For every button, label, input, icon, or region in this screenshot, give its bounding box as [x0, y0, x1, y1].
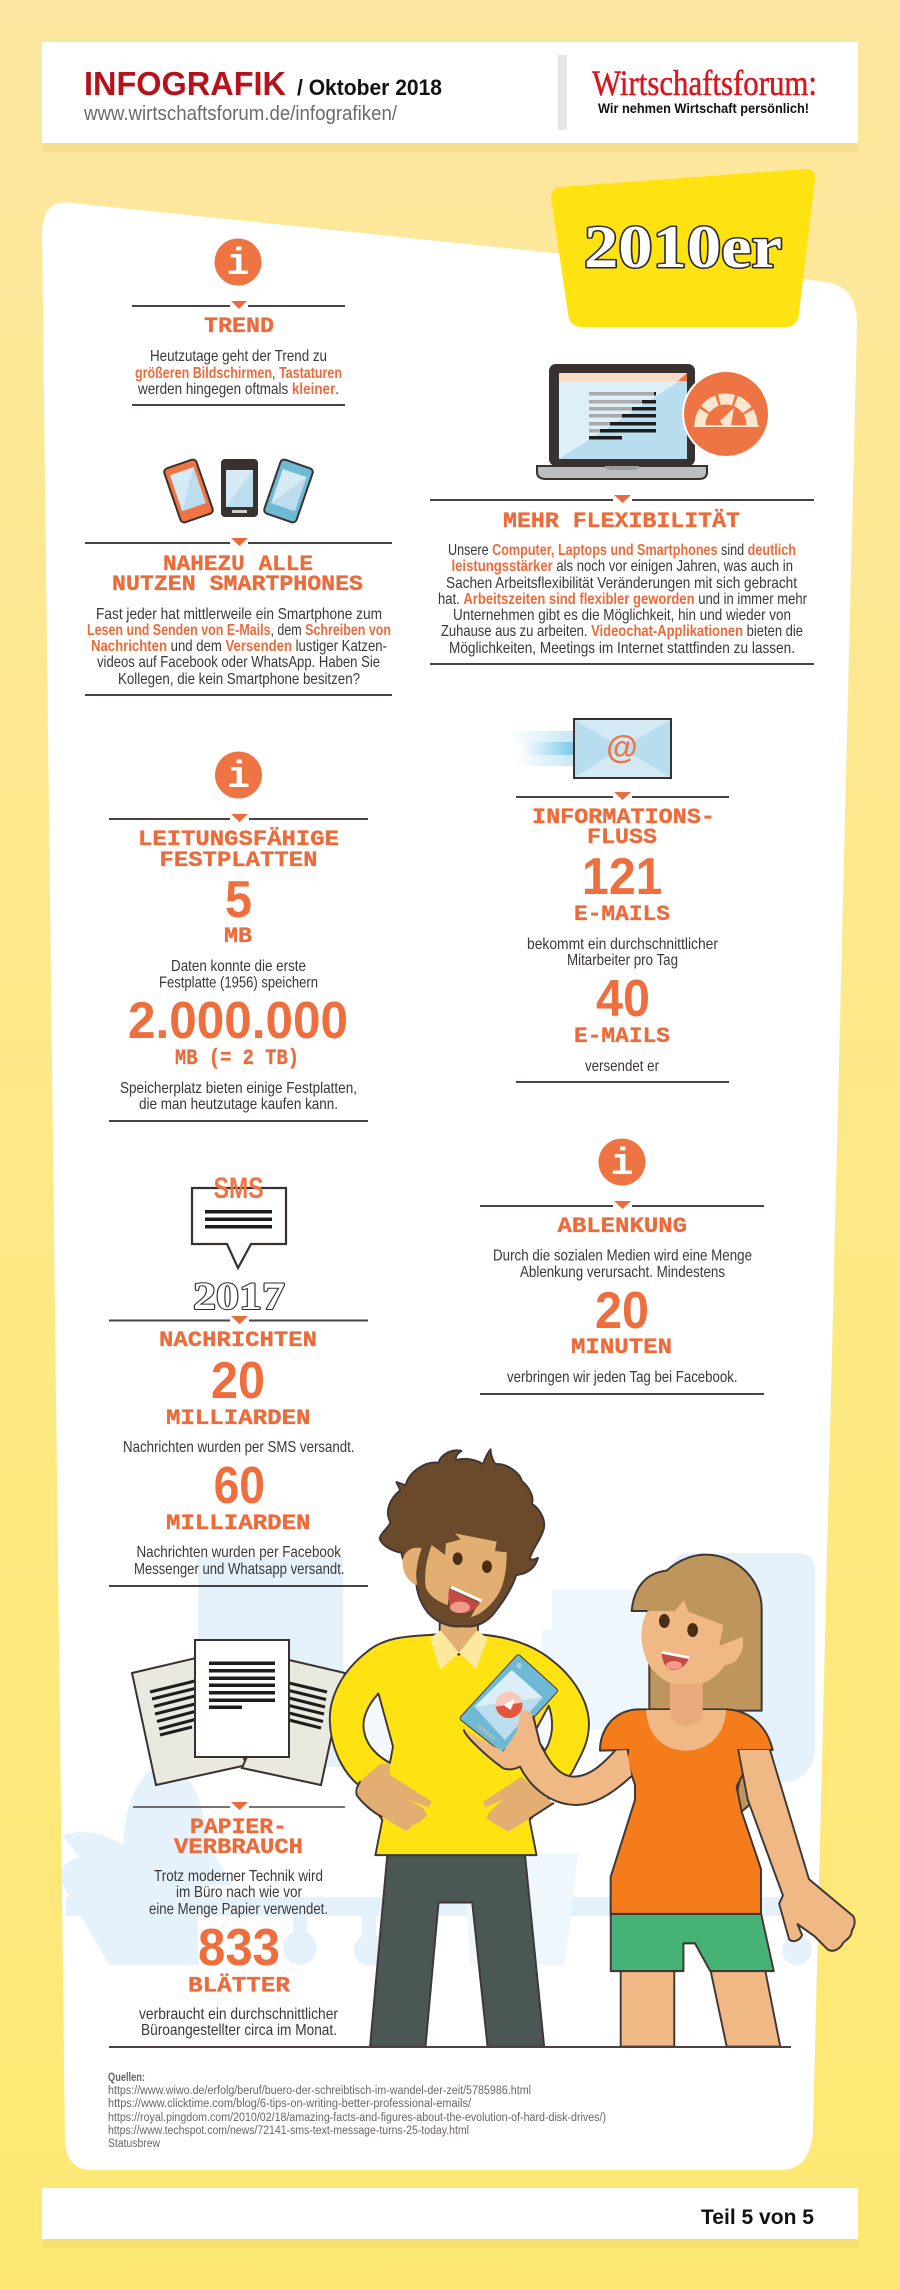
- heading: [112, 552, 363, 597]
- body text: [135, 348, 342, 398]
- number: 5: 5: [225, 871, 252, 929]
- man: hands: [356, 1763, 553, 1832]
- text: Daten konnte die erste: [171, 958, 306, 975]
- unit: BLÄTTER: [188, 1974, 291, 1998]
- body text: Fast jeder hat mittlerweile ein Smartphone zum: [96, 606, 382, 623]
- heading: TREND: [204, 314, 274, 339]
- illustration: phone: [463, 1657, 555, 1749]
- divider: [132, 301, 345, 309]
- text: im Büro nach wie vor: [176, 1884, 303, 1901]
- panel: Ablenkung: [480, 1138, 764, 1394]
- unit: MB (= 2 TB): [175, 1046, 299, 1071]
- unit: E-MAILS: [574, 1024, 670, 1049]
- divider: [109, 814, 368, 822]
- divider: [133, 1802, 345, 1810]
- body text: Nachrichten und dem Versenden lustiger Katzen-: [91, 638, 387, 655]
- panel: Leitungsfähige Festplatten: [109, 752, 368, 1121]
- woman: shirt and neck: [600, 1683, 773, 1914]
- panel: Nahezu alle nutzen Smartphones: [85, 459, 392, 695]
- text: Speicherplatz bieten einige Festplatten,: [120, 1080, 357, 1097]
- text: Messenger und Whatsapp versandt.: [134, 1561, 344, 1578]
- era label: 2010er: 2010er: [584, 214, 782, 280]
- woman: right arm and hand: [738, 1750, 855, 1951]
- illustration: woman: [600, 1555, 855, 2047]
- year: 2017: 2017: [193, 1275, 285, 1318]
- heading: VERBRAUCH: [174, 1835, 303, 1860]
- text: Festplatte (1956) speichern: [159, 974, 318, 992]
- heading: [138, 827, 339, 873]
- text: verbringen wir jeden Tag bei Facebook.: [507, 1369, 738, 1386]
- number: 40: 40: [596, 970, 650, 1028]
- icon: three phones: [163, 459, 314, 523]
- text: [120, 1080, 357, 1113]
- body text: hat. Arbeitszeiten sind flexibler geworden und in immer mehr: [438, 591, 808, 608]
- number: 60: 60: [214, 1457, 265, 1515]
- heading: [174, 1815, 303, 1860]
- heading: PAPIER-: [190, 1815, 287, 1840]
- divider: [109, 1316, 368, 1324]
- heading: ABLENKUNG: [558, 1214, 687, 1239]
- url: www.wirtschaftsforum.de/infografiken/: [83, 103, 397, 125]
- body text: Heutzutage geht der Trend zu: [150, 348, 327, 365]
- icon: flying envelope: @: [606, 729, 638, 765]
- text: versendet er: [585, 1058, 660, 1075]
- body text: Unsere Computer, Laptops und Smartphones sind deutlich: [448, 542, 796, 559]
- icon: info: i: [227, 756, 250, 799]
- background office silhouette: [61, 1553, 815, 1966]
- body text: werden hingegen oftmals kleiner.: [137, 381, 339, 398]
- panel: Nachrichten: [109, 1172, 368, 1586]
- unit: MILLIARDEN: [166, 1511, 310, 1536]
- number: 20: 20: [595, 1282, 649, 1340]
- icon: SMS bubble: SMS: [214, 1172, 264, 1205]
- text: Nachrichten wurden per Facebook: [136, 1544, 342, 1561]
- number: 833: 833: [198, 1919, 280, 1977]
- panel: Papierverbrauch: [132, 1640, 345, 2039]
- yellow era tag: [551, 169, 815, 327]
- woman: legs: [621, 1969, 780, 2047]
- heading: INFORMATIONS-: [532, 805, 715, 830]
- sources: https://royal.pingdom.com/2010/02/18/amazing-facts-and-figures-about-the-evolution-of-hard-disk-drives/): [108, 2112, 606, 2124]
- divider: [480, 1201, 764, 1209]
- heading: NACHRICHTEN: [159, 1328, 317, 1353]
- sources: https://www.wiwo.de/erfolg/beruf/buero-der-schreibtisch-im-wandel-der-zeit/5785986.html: [108, 2085, 531, 2097]
- sources: [108, 2072, 606, 2150]
- footer bar: [42, 2188, 858, 2248]
- heading: MEHR FLEXIBILITÄT: [503, 509, 740, 534]
- sources: Statusbrew: [108, 2138, 161, 2150]
- heading: [532, 805, 715, 850]
- icon: info: [214, 238, 262, 286]
- icon: laptop with gauge: [537, 364, 769, 479]
- illustration: woman's arm holding phone: [464, 1710, 632, 1805]
- sources: https://www.techspot.com/news/72141-sms-text-message-turns-25-today.html: [108, 2125, 469, 2137]
- divider: [430, 495, 814, 503]
- text: [159, 958, 318, 992]
- text: [493, 1248, 752, 1281]
- icon: paper sheets: [132, 1640, 345, 1785]
- ground line: [109, 2046, 791, 2048]
- man: body and hair: [330, 1449, 589, 2047]
- text: [527, 936, 719, 969]
- body text: Möglichkeiten, Meetings im Internet stattfinden zu lassen.: [449, 640, 795, 657]
- logo tagline: Wir nehmen Wirtschaft persönlich!: [598, 100, 809, 116]
- text: verbraucht ein durchschnittlicher: [139, 2006, 339, 2023]
- icon: info: i: [227, 243, 249, 286]
- text: Nachrichten wurden per SMS versandt.: [123, 1439, 354, 1456]
- sources: Quellen:: [108, 2072, 145, 2084]
- unit: MB: [224, 924, 252, 949]
- heading: FLUSS: [587, 825, 657, 850]
- body text: Lesen und Senden von E-Mails, dem Schreiben von: [87, 622, 391, 639]
- part label: Teil 5 von 5: [701, 2206, 814, 2229]
- icon: SMS bubble: [192, 1172, 286, 1268]
- text: [149, 1868, 328, 1918]
- icon: info: [598, 1138, 646, 1186]
- icon: info: [215, 752, 262, 799]
- text: Ablenkung verursacht. Mindestens: [520, 1264, 725, 1281]
- text: eine Menge Papier verwendet.: [149, 1901, 328, 1918]
- text: die man heutzutage kaufen kann.: [139, 1096, 338, 1113]
- panel: Mehr Flexibilität: [430, 364, 814, 664]
- icon: flying envelope: [509, 719, 671, 778]
- text: Büroangestellter circa im Monat.: [141, 2022, 337, 2039]
- heading: FESTPLATTEN: [160, 848, 318, 873]
- text: [139, 2006, 339, 2039]
- logo wordmark: Wirtschaftsforum:: [592, 63, 817, 103]
- text: Trotz moderner Technik wird: [154, 1868, 323, 1885]
- main white panel: [42, 202, 857, 2170]
- woman: shorts: [611, 1750, 855, 1971]
- unit: MILLIARDEN: [166, 1406, 310, 1431]
- header bar: [42, 42, 858, 152]
- number: 2.000.000: 2.000.000: [128, 992, 348, 1050]
- text: Durch die sozialen Medien wird eine Menge: [493, 1248, 752, 1264]
- illustration: man: [330, 1449, 589, 2047]
- body text: Unternehmen gibt es die Möglichkeit, hin und wieder von: [453, 607, 791, 624]
- body text: videos auf Facebook oder WhatsApp. Haben Sie: [97, 654, 380, 671]
- unit: MINUTEN: [571, 1335, 672, 1360]
- body text: leistungsstärker als noch vor einigen Jahren, was auch in: [452, 558, 793, 575]
- panel: Trend: [132, 238, 345, 405]
- heading: NUTZEN SMARTPHONES: [112, 572, 363, 597]
- body text: [87, 606, 391, 688]
- text: [134, 1544, 344, 1578]
- heading: NAHEZU ALLE: [163, 552, 313, 577]
- man: face: [403, 1533, 507, 1617]
- woman: hair and face: [632, 1555, 762, 1812]
- body text: [438, 542, 808, 657]
- panel: Informationsfluss: [509, 719, 729, 1082]
- body text: Sachen Arbeitsflexibilität Veränderungen mit sich gebracht: [446, 575, 797, 592]
- heading: INFOGRAFIK: INFOGRAFIK: [84, 65, 286, 102]
- divider: [85, 538, 392, 546]
- number: 121: 121: [582, 848, 662, 906]
- icon: info: i: [611, 1143, 633, 1186]
- body text: größeren Bildschirmen, Tastaturen: [135, 365, 342, 382]
- body text: Kollegen, die kein Smartphone besitzen?: [118, 671, 360, 688]
- number: 20: 20: [211, 1352, 265, 1410]
- unit: E-MAILS: [574, 902, 670, 927]
- sources: https://www.clicktime.com/blog/6-tips-on-writing-better-professional-emails/: [108, 2098, 472, 2110]
- text: Mitarbeiter pro Tag: [567, 952, 678, 969]
- text: bekommt ein durchschnittlicher: [527, 936, 719, 953]
- body text: Zuhause aus zu arbeiten. Videochat-Applikationen bieten die: [441, 623, 803, 640]
- heading: LEITUNGSFÄHIGE: [138, 827, 339, 852]
- divider: [516, 792, 729, 800]
- date: / Oktober 2018: [297, 75, 442, 100]
